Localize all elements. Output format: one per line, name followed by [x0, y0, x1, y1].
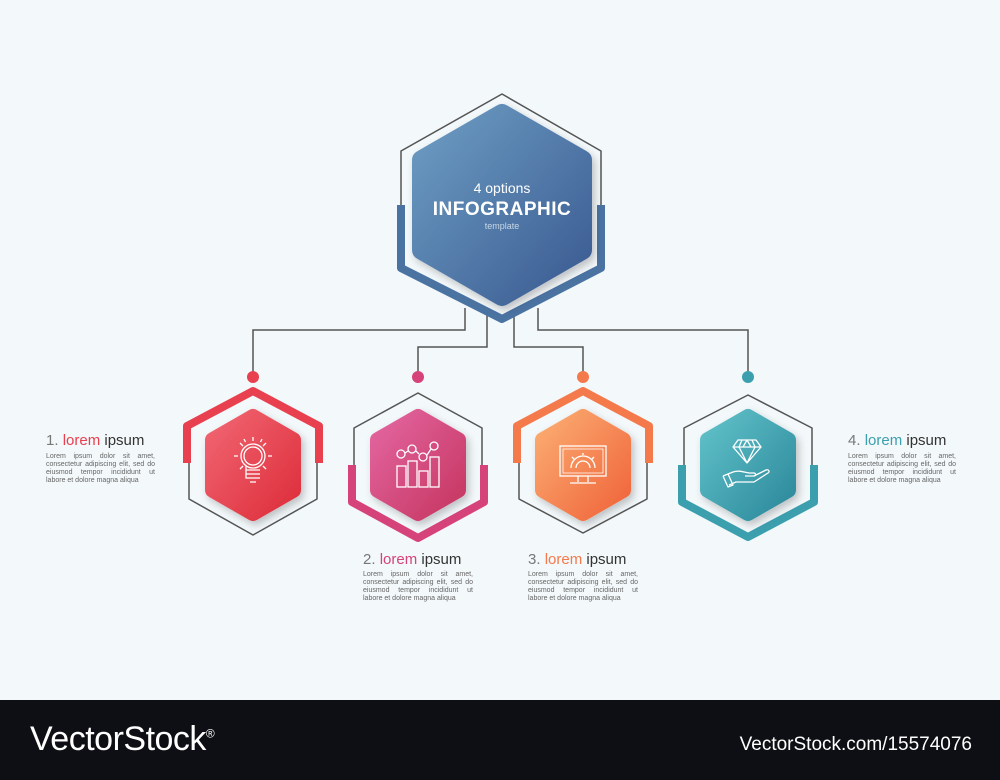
item 3 hexagon: monitor [517, 391, 649, 533]
text: item 3: labore et dolore magna aliqua [528, 595, 621, 602]
footer bar [0, 700, 1000, 780]
text: item 3: consectetur adipiscing elit, sed do [528, 579, 638, 586]
connectors [253, 308, 748, 372]
text: item 2: labore et dolore magna aliqua [363, 595, 456, 602]
central hexagon: 4 options [474, 180, 530, 196]
text: item 2: consectetur adipiscing elit, sed do [363, 579, 473, 586]
dots [247, 371, 754, 383]
central hexagon: INFOGRAPHIC [433, 199, 571, 220]
item 2 hexagon: chart [352, 393, 484, 538]
text: item 1 [46, 432, 155, 484]
item 1 hexagon: bulb [187, 391, 319, 535]
central hexagon [401, 94, 601, 319]
text: item 1: eiusmod tempor incididunt ut [46, 469, 155, 476]
text: item 2: eiusmod tempor incididunt ut [363, 587, 473, 594]
text: item 3: eiusmod tempor incididunt ut [528, 587, 638, 594]
text: item 4: 4. lorem ipsum [848, 432, 946, 449]
text: item 4: Lorem ipsum dolor sit amet, [848, 453, 956, 460]
text: item 3: Lorem ipsum dolor sit amet, [528, 571, 638, 578]
text: item 1: consectetur adipiscing elit, sed do [46, 461, 155, 468]
text: item 2: 2. lorem ipsum [363, 551, 461, 568]
text: item 1: Lorem ipsum dolor sit amet, [46, 453, 155, 460]
text: item 1: labore et dolore magna aliqua [46, 477, 139, 484]
text: item 4: labore et dolore magna aliqua [848, 477, 941, 484]
text: item 4: eiusmod tempor incididunt ut [848, 469, 956, 476]
footer bar: VectorStock.com/15574076 [740, 734, 972, 755]
footer bar: VectorStock® [30, 720, 214, 758]
text: item 3 [528, 551, 638, 602]
text: item 3: 3. lorem ipsum [528, 551, 626, 568]
central hexagon: template [485, 221, 519, 231]
item 4 hexagon: diamond hand [682, 395, 814, 537]
text: item 4: consectetur adipiscing elit, sed do [848, 461, 956, 468]
text: item 2 [363, 551, 473, 602]
text: item 4 [848, 432, 956, 484]
text: item 2: Lorem ipsum dolor sit amet, [363, 571, 473, 578]
text: item 1: 1. lorem ipsum [46, 432, 144, 449]
